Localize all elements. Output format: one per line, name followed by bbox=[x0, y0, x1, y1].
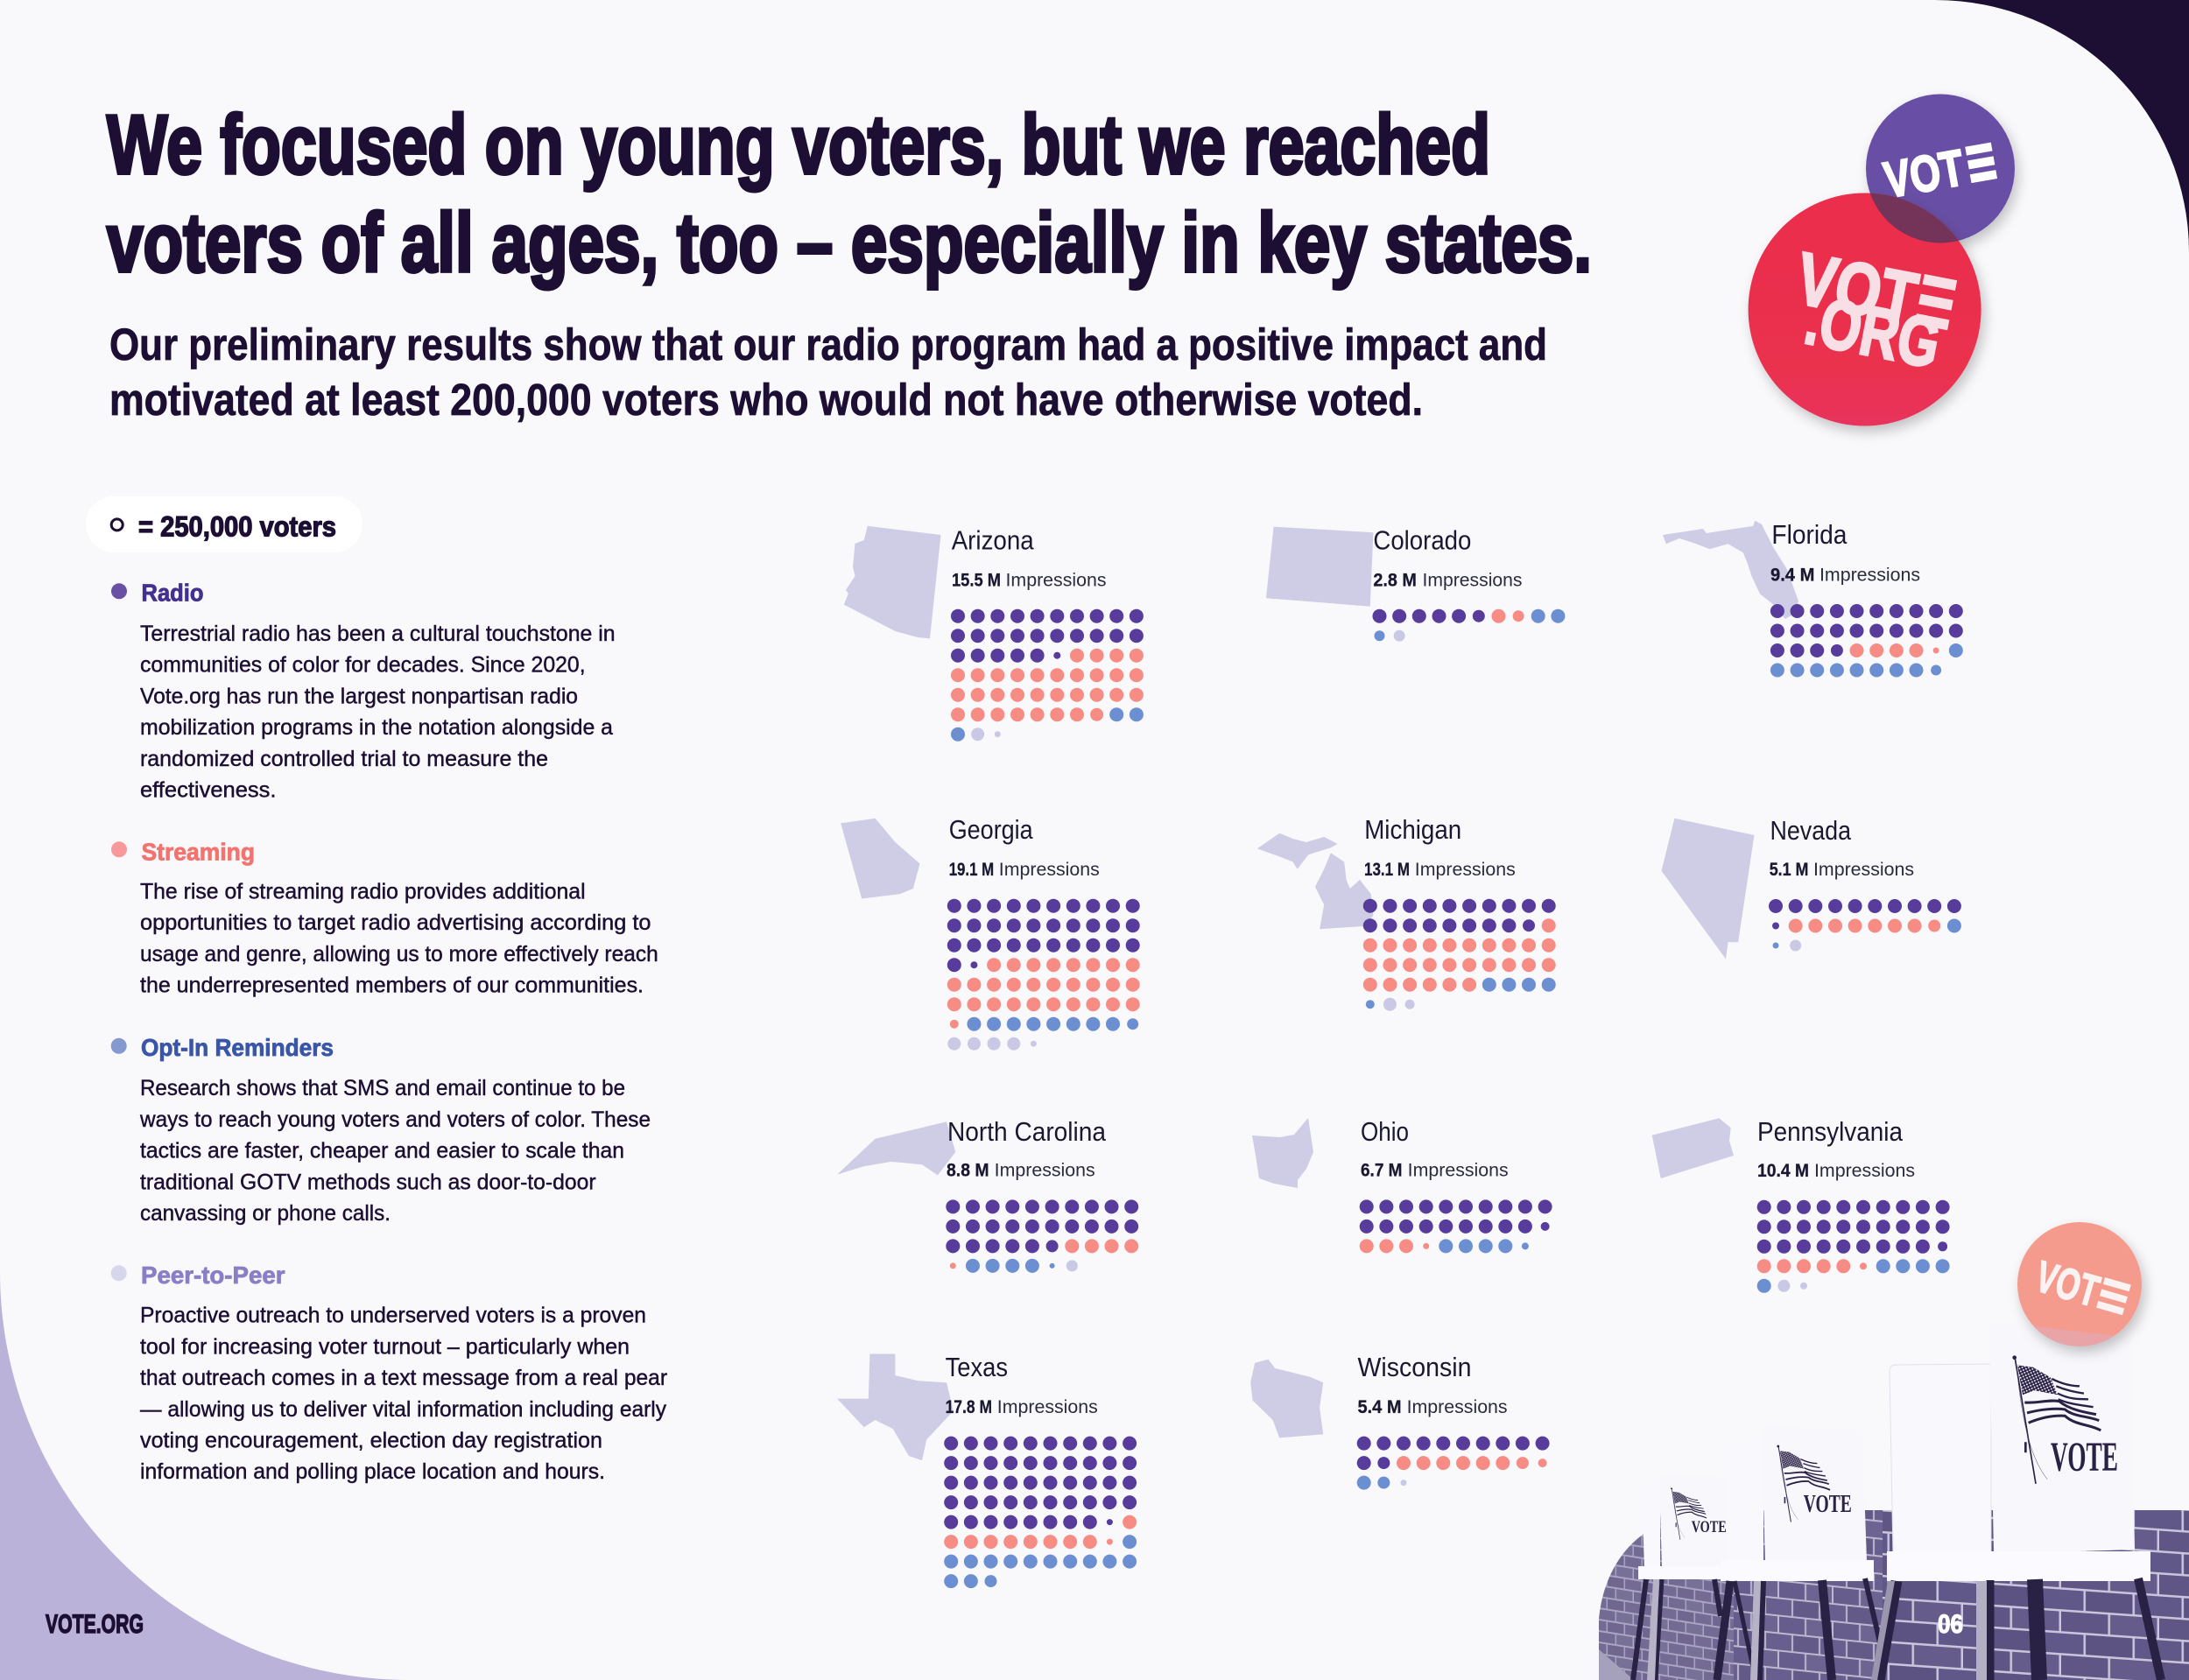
impressions bbox=[1757, 1161, 1915, 1181]
footer logo text: VOTE.ORG bbox=[46, 1610, 144, 1639]
booth: small bbox=[1633, 1474, 1728, 1680]
sticker: purple VOTE bbox=[1866, 95, 2015, 243]
map: Texas bbox=[837, 1353, 954, 1460]
panel: Radio: Vote.org has run the largest nonpartisan radio bbox=[140, 684, 578, 708]
impressions bbox=[952, 570, 1107, 590]
panel: Wisconsin bbox=[1250, 1353, 1550, 1490]
panel: Peer-to-Peer: information and polling place location and hours. bbox=[140, 1459, 605, 1484]
dot chart bbox=[1770, 604, 1963, 678]
impressions: Impressions bbox=[999, 860, 1100, 880]
panel: Streaming: The rise of streaming radio provides additional bbox=[140, 879, 586, 903]
impressions: Impressions bbox=[1814, 1161, 1915, 1181]
impressions: Impressions bbox=[1422, 570, 1522, 590]
panel: Radio: Radio bbox=[142, 579, 203, 606]
subtitle: motivated at least 200,000 voters who would not have otherwise voted. bbox=[109, 375, 1423, 425]
map: Colorado bbox=[1266, 527, 1373, 607]
state name: Michigan bbox=[1364, 815, 1461, 845]
corner shape: top right bbox=[1935, 0, 2189, 252]
panel: Streaming bbox=[111, 839, 658, 998]
impressions bbox=[1373, 570, 1522, 590]
panel: Opt-In Reminders: canvassing or phone calls. bbox=[140, 1201, 391, 1226]
dot chart bbox=[946, 1199, 1138, 1273]
dot chart bbox=[1363, 899, 1556, 1011]
impressions: Impressions bbox=[1813, 860, 1914, 880]
title: voters of all ages, too – especially in key states. bbox=[107, 196, 1592, 290]
impressions: 5.1 M bbox=[1770, 860, 1809, 880]
panel: Florida bbox=[1663, 520, 1963, 678]
dot chart bbox=[951, 609, 1144, 742]
panel: Radio bbox=[111, 579, 616, 802]
panel: Opt-In Reminders: traditional GOTV methods such as door-to-door bbox=[140, 1170, 596, 1194]
panel: Peer-to-Peer: Peer-to-Peer bbox=[141, 1262, 285, 1289]
brick wall bbox=[1594, 1506, 2189, 1680]
panel: Streaming: usage and genre, allowing us to more effectively reach bbox=[140, 942, 658, 967]
state name: Ohio bbox=[1361, 1117, 1409, 1147]
state name: Pennsylvania bbox=[1757, 1117, 1903, 1147]
panel: Georgia bbox=[841, 815, 1140, 1051]
sticker: red VOTE.ORG: VOT bbox=[1791, 236, 1924, 341]
impressions: Impressions bbox=[1005, 570, 1107, 590]
sticker: purple VOTE: VOT bbox=[1880, 139, 1968, 209]
panel: Ohio bbox=[1252, 1117, 1552, 1253]
impressions: 2.8 M bbox=[1373, 570, 1417, 590]
dot chart bbox=[1757, 1200, 1950, 1293]
impressions bbox=[946, 1397, 1098, 1417]
impressions: 17.8 M bbox=[946, 1397, 992, 1417]
booth: large: VOTE bbox=[2051, 1434, 2118, 1480]
sticker: red VOTE.ORG: .ORG bbox=[1799, 280, 1946, 383]
legend key: = 250,000 voters bbox=[138, 511, 336, 543]
panel: Nevada bbox=[1662, 816, 1961, 959]
panel: Opt-In Reminders: ways to reach young voters and voters of color. These bbox=[139, 1107, 651, 1132]
booth: middle: VOTE bbox=[1804, 1490, 1852, 1518]
panel: Streaming: the underrepresented members of our communities. bbox=[140, 974, 644, 998]
panel: Arizona bbox=[844, 525, 1144, 742]
impressions: 5.4 M bbox=[1357, 1397, 1401, 1417]
impressions bbox=[1361, 1161, 1509, 1181]
state name: Wisconsin bbox=[1357, 1353, 1471, 1382]
panel: Peer-to-Peer: that outreach comes in a text message from a real pear bbox=[140, 1366, 667, 1390]
sticker: Vote.org red and purple bbox=[1749, 95, 2015, 425]
impressions: 15.5 M bbox=[952, 570, 1001, 590]
panel: Opt-In Reminders: tactics are faster, cheaper and easier to scale than bbox=[140, 1139, 624, 1163]
panel: North Carolina bbox=[837, 1117, 1138, 1273]
panel: Streaming: Streaming bbox=[142, 839, 255, 866]
panel: Michigan bbox=[1257, 815, 1556, 1011]
state name: Texas bbox=[946, 1353, 1008, 1382]
booth: middle bbox=[1717, 1425, 1883, 1680]
impressions: 13.1 M bbox=[1364, 860, 1410, 880]
map: Ohio bbox=[1252, 1118, 1313, 1188]
impressions bbox=[947, 1161, 1095, 1181]
booth: small: VOTE bbox=[1692, 1518, 1727, 1536]
map: North Carolina bbox=[837, 1121, 955, 1175]
impressions: Impressions bbox=[1408, 1161, 1509, 1181]
subtitle bbox=[109, 320, 1547, 425]
impressions: Impressions bbox=[1819, 566, 1920, 586]
state name: Florida bbox=[1771, 520, 1847, 550]
impressions: 6.7 M bbox=[1361, 1161, 1403, 1181]
panel: Opt-In Reminders: Opt-In Reminders bbox=[141, 1034, 334, 1061]
panel: Peer-to-Peer: Proactive outreach to underserved voters is a proven bbox=[140, 1304, 646, 1328]
sticker: salmon VOTE: VOT bbox=[2031, 1252, 2105, 1316]
sticker: salmon VOTE bbox=[2017, 1222, 2142, 1346]
impressions: Impressions bbox=[1407, 1397, 1508, 1417]
impressions: 10.4 M bbox=[1757, 1161, 1809, 1181]
panel: Pennsylvania bbox=[1652, 1117, 1950, 1293]
map: Pennsylvania bbox=[1652, 1118, 1734, 1178]
subtitle: Our preliminary results show that our radio program had a positive impact and bbox=[109, 320, 1547, 369]
sticker: red VOTE.ORG bbox=[1746, 193, 1991, 438]
impressions bbox=[1357, 1397, 1508, 1417]
impressions: 9.4 M bbox=[1770, 566, 1814, 586]
impressions bbox=[1364, 860, 1516, 880]
photo: voting booths against a brick wall bbox=[1599, 1355, 2189, 1680]
panel: Radio: mobilization programs in the notation alongside a bbox=[140, 715, 613, 740]
state name: Arizona bbox=[952, 525, 1034, 555]
legend key bbox=[86, 496, 362, 552]
panel: Peer-to-Peer: — allowing us to deliver vital information including early bbox=[140, 1397, 666, 1422]
title bbox=[107, 98, 1592, 290]
corner shape: bottom left bbox=[0, 1272, 410, 1680]
panel: Radio: communities of color for decades. Since 2020, bbox=[140, 653, 586, 678]
map: Michigan bbox=[1257, 833, 1373, 929]
state name: Nevada bbox=[1770, 816, 1851, 846]
map: Florida bbox=[1663, 521, 1798, 619]
impressions bbox=[949, 860, 1100, 880]
dot chart bbox=[944, 1437, 1137, 1588]
panel: Peer-to-Peer bbox=[111, 1262, 667, 1484]
impressions: Impressions bbox=[997, 1397, 1098, 1417]
impressions: 19.1 M bbox=[949, 860, 994, 880]
panel: Radio: Terrestrial radio has been a cultural touchstone in bbox=[140, 622, 616, 646]
map: Nevada bbox=[1662, 819, 1755, 959]
state name: North Carolina bbox=[947, 1117, 1106, 1147]
panel: Texas bbox=[837, 1353, 1137, 1588]
state name: Georgia bbox=[949, 815, 1033, 845]
panel: Streaming: opportunities to target radio advertising according to bbox=[140, 910, 651, 935]
panel: Opt-In Reminders bbox=[111, 1034, 651, 1226]
panel: Peer-to-Peer: tool for increasing voter turnout – particularly when bbox=[140, 1334, 630, 1359]
panel: Peer-to-Peer: voting encouragement, election day registration bbox=[140, 1429, 602, 1453]
impressions: Impressions bbox=[995, 1161, 1095, 1181]
state name: Colorado bbox=[1373, 525, 1471, 555]
panel: Colorado bbox=[1266, 525, 1565, 642]
dot chart bbox=[1769, 899, 1961, 951]
map: Wisconsin bbox=[1250, 1360, 1323, 1437]
map: Georgia bbox=[841, 819, 919, 898]
impressions bbox=[1770, 860, 1914, 880]
map: Arizona bbox=[844, 526, 940, 638]
booth: large bbox=[1871, 1322, 2161, 1680]
dot chart bbox=[1373, 609, 1565, 642]
title: We focused on young voters, but we reached bbox=[107, 98, 1490, 192]
dot chart bbox=[1357, 1437, 1550, 1490]
page number: 06 bbox=[1938, 1610, 1963, 1639]
dot chart bbox=[947, 899, 1140, 1051]
panel: Opt-In Reminders: Research shows that SMS and email continue to be bbox=[140, 1076, 625, 1100]
impressions: 8.8 M bbox=[947, 1161, 989, 1181]
panel: Radio: effectiveness. bbox=[140, 777, 277, 802]
dot chart bbox=[1360, 1199, 1552, 1253]
panel: Radio: randomized controlled trial to measure the bbox=[140, 747, 548, 771]
impressions bbox=[1770, 566, 1920, 586]
impressions: Impressions bbox=[1415, 860, 1516, 880]
